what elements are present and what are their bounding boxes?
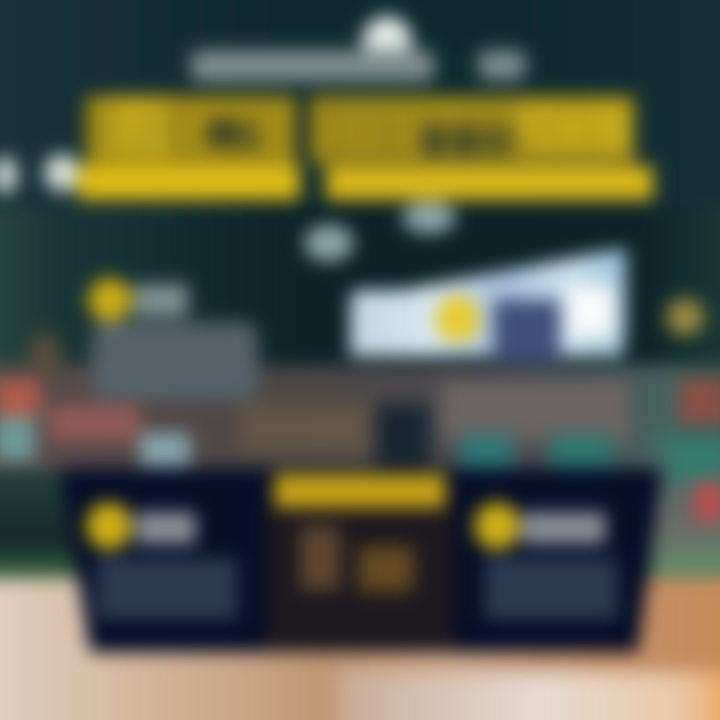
background: right wall and grass (650, 430, 720, 600)
background: left wall and grass (0, 470, 80, 580)
text block: bottom left (96, 558, 238, 620)
figure cluster center (240, 403, 370, 453)
title line 1 right (310, 96, 635, 164)
background: stadium shadow band (0, 205, 720, 375)
highlight: under title left (304, 224, 354, 262)
icon: bottom right yellow badge (474, 502, 520, 550)
figure cluster right (440, 380, 630, 442)
highlight: top band left (190, 50, 435, 82)
title dark letter gap left (208, 120, 258, 150)
background: stadium sky (0, 0, 720, 230)
highlight: left light 2 (44, 154, 80, 192)
center banner (274, 474, 446, 508)
background: infield dirt (0, 578, 720, 720)
highlight: left light (0, 156, 18, 194)
background: crowd band (0, 365, 720, 475)
heading: upper left (134, 284, 188, 316)
title yellow accent right (518, 102, 628, 152)
figure cluster left (0, 380, 40, 416)
text block: bottom right (484, 558, 618, 620)
heading: bottom left (136, 512, 196, 544)
icon: bottom left yellow badge (86, 502, 132, 550)
title (64, 82, 668, 215)
background: pale dirt lower band (340, 672, 720, 720)
title dark letter gap right (423, 126, 513, 156)
text block: upper left (92, 322, 258, 400)
screen bright spot (568, 286, 614, 336)
center photo (265, 508, 455, 652)
title line 2 left (78, 166, 300, 200)
highlight: under title right (402, 202, 456, 234)
screen dark figure (494, 300, 560, 362)
center photo figure left (300, 526, 340, 590)
title text: JACK HITTING (86, 89, 604, 172)
heading: bottom right (522, 512, 606, 544)
screen yellow badge (436, 296, 480, 342)
title line 1 left (86, 96, 296, 166)
center photo figure right (358, 546, 414, 592)
panel: screen (350, 248, 626, 356)
highlight: top band right (478, 50, 526, 80)
panel: bottom board (60, 468, 662, 652)
crowd figures (0, 326, 720, 532)
title line 2 right (326, 166, 653, 200)
icon: upper left yellow badge (88, 278, 132, 322)
highlight: top light (362, 16, 412, 68)
icon: right yellow dot (666, 298, 704, 336)
screen upper extension (352, 290, 624, 356)
title yellow accent left (108, 96, 168, 156)
